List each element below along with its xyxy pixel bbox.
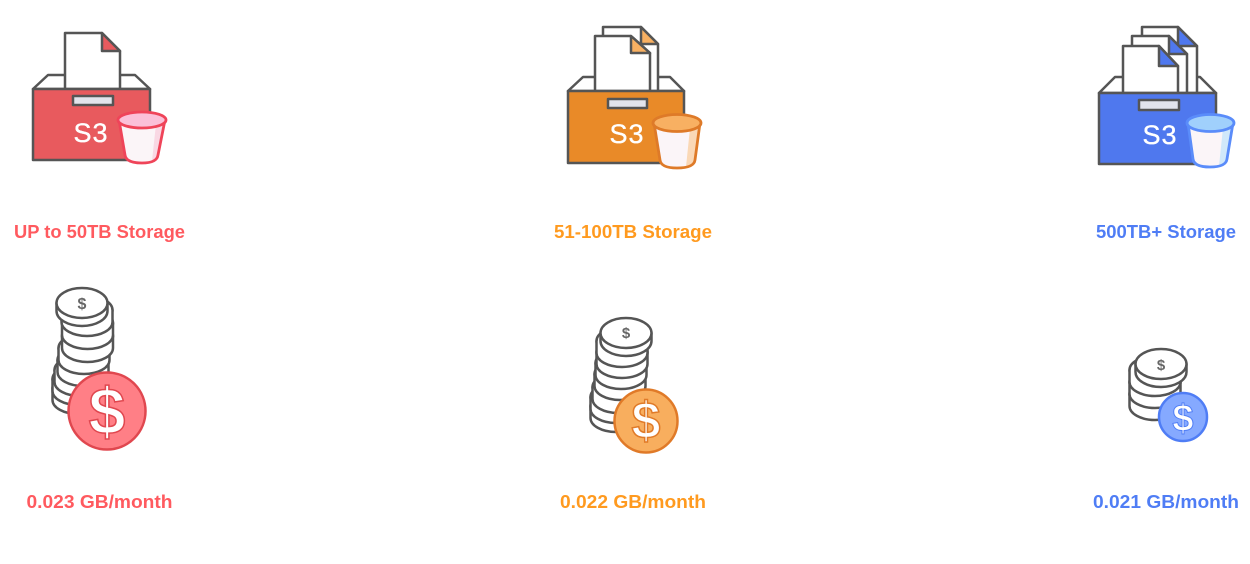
middle document	[1132, 36, 1187, 93]
back document	[603, 27, 658, 91]
bucket	[1187, 114, 1234, 167]
coin stack: $	[622, 325, 631, 342]
document	[65, 33, 120, 89]
label: 500TB+: 500TB+ Storage	[1096, 222, 1236, 242]
icon: tall red coin stack with dollar coin	[52, 288, 146, 450]
dollar coin: $	[1172, 398, 1194, 440]
dollar coin	[68, 372, 146, 450]
label: blue price: 0.021 GB/month	[1093, 492, 1239, 512]
box label slot	[1139, 100, 1179, 110]
label: orange price: 0.022 GB/month	[560, 492, 706, 512]
coin stack	[52, 288, 113, 414]
coin stack: $	[78, 296, 87, 313]
label: red price: 0.023 GB/month	[26, 492, 172, 512]
box body	[1099, 93, 1216, 164]
bucket	[118, 112, 166, 163]
dollar coin: $	[89, 374, 125, 448]
box body	[33, 89, 150, 160]
box label slot	[608, 99, 647, 108]
S3 label: S3	[609, 119, 645, 149]
icon: small blue coin stack with dollar coin	[1130, 349, 1207, 441]
icon: blue S3 box with three documents and bucket	[1099, 27, 1234, 167]
S3 label: S3	[73, 118, 109, 148]
front document	[595, 36, 650, 91]
icon: red S3 box with one document and bucket	[33, 33, 166, 163]
back document	[1142, 27, 1197, 93]
dollar coin: $	[632, 392, 661, 450]
label: up to 50TB: UP to 50TB Storage	[14, 222, 185, 242]
bucket	[653, 114, 701, 168]
box label slot	[73, 96, 113, 105]
box body	[568, 91, 684, 163]
coin stack: $	[1157, 357, 1166, 374]
icon: orange S3 box with two documents and bucket	[568, 27, 701, 168]
front document	[1123, 46, 1178, 93]
icon: medium orange coin stack with dollar coin	[590, 318, 678, 452]
label: 51-100TB: 51-100TB Storage	[554, 222, 712, 242]
S3 label: S3	[1142, 120, 1178, 150]
